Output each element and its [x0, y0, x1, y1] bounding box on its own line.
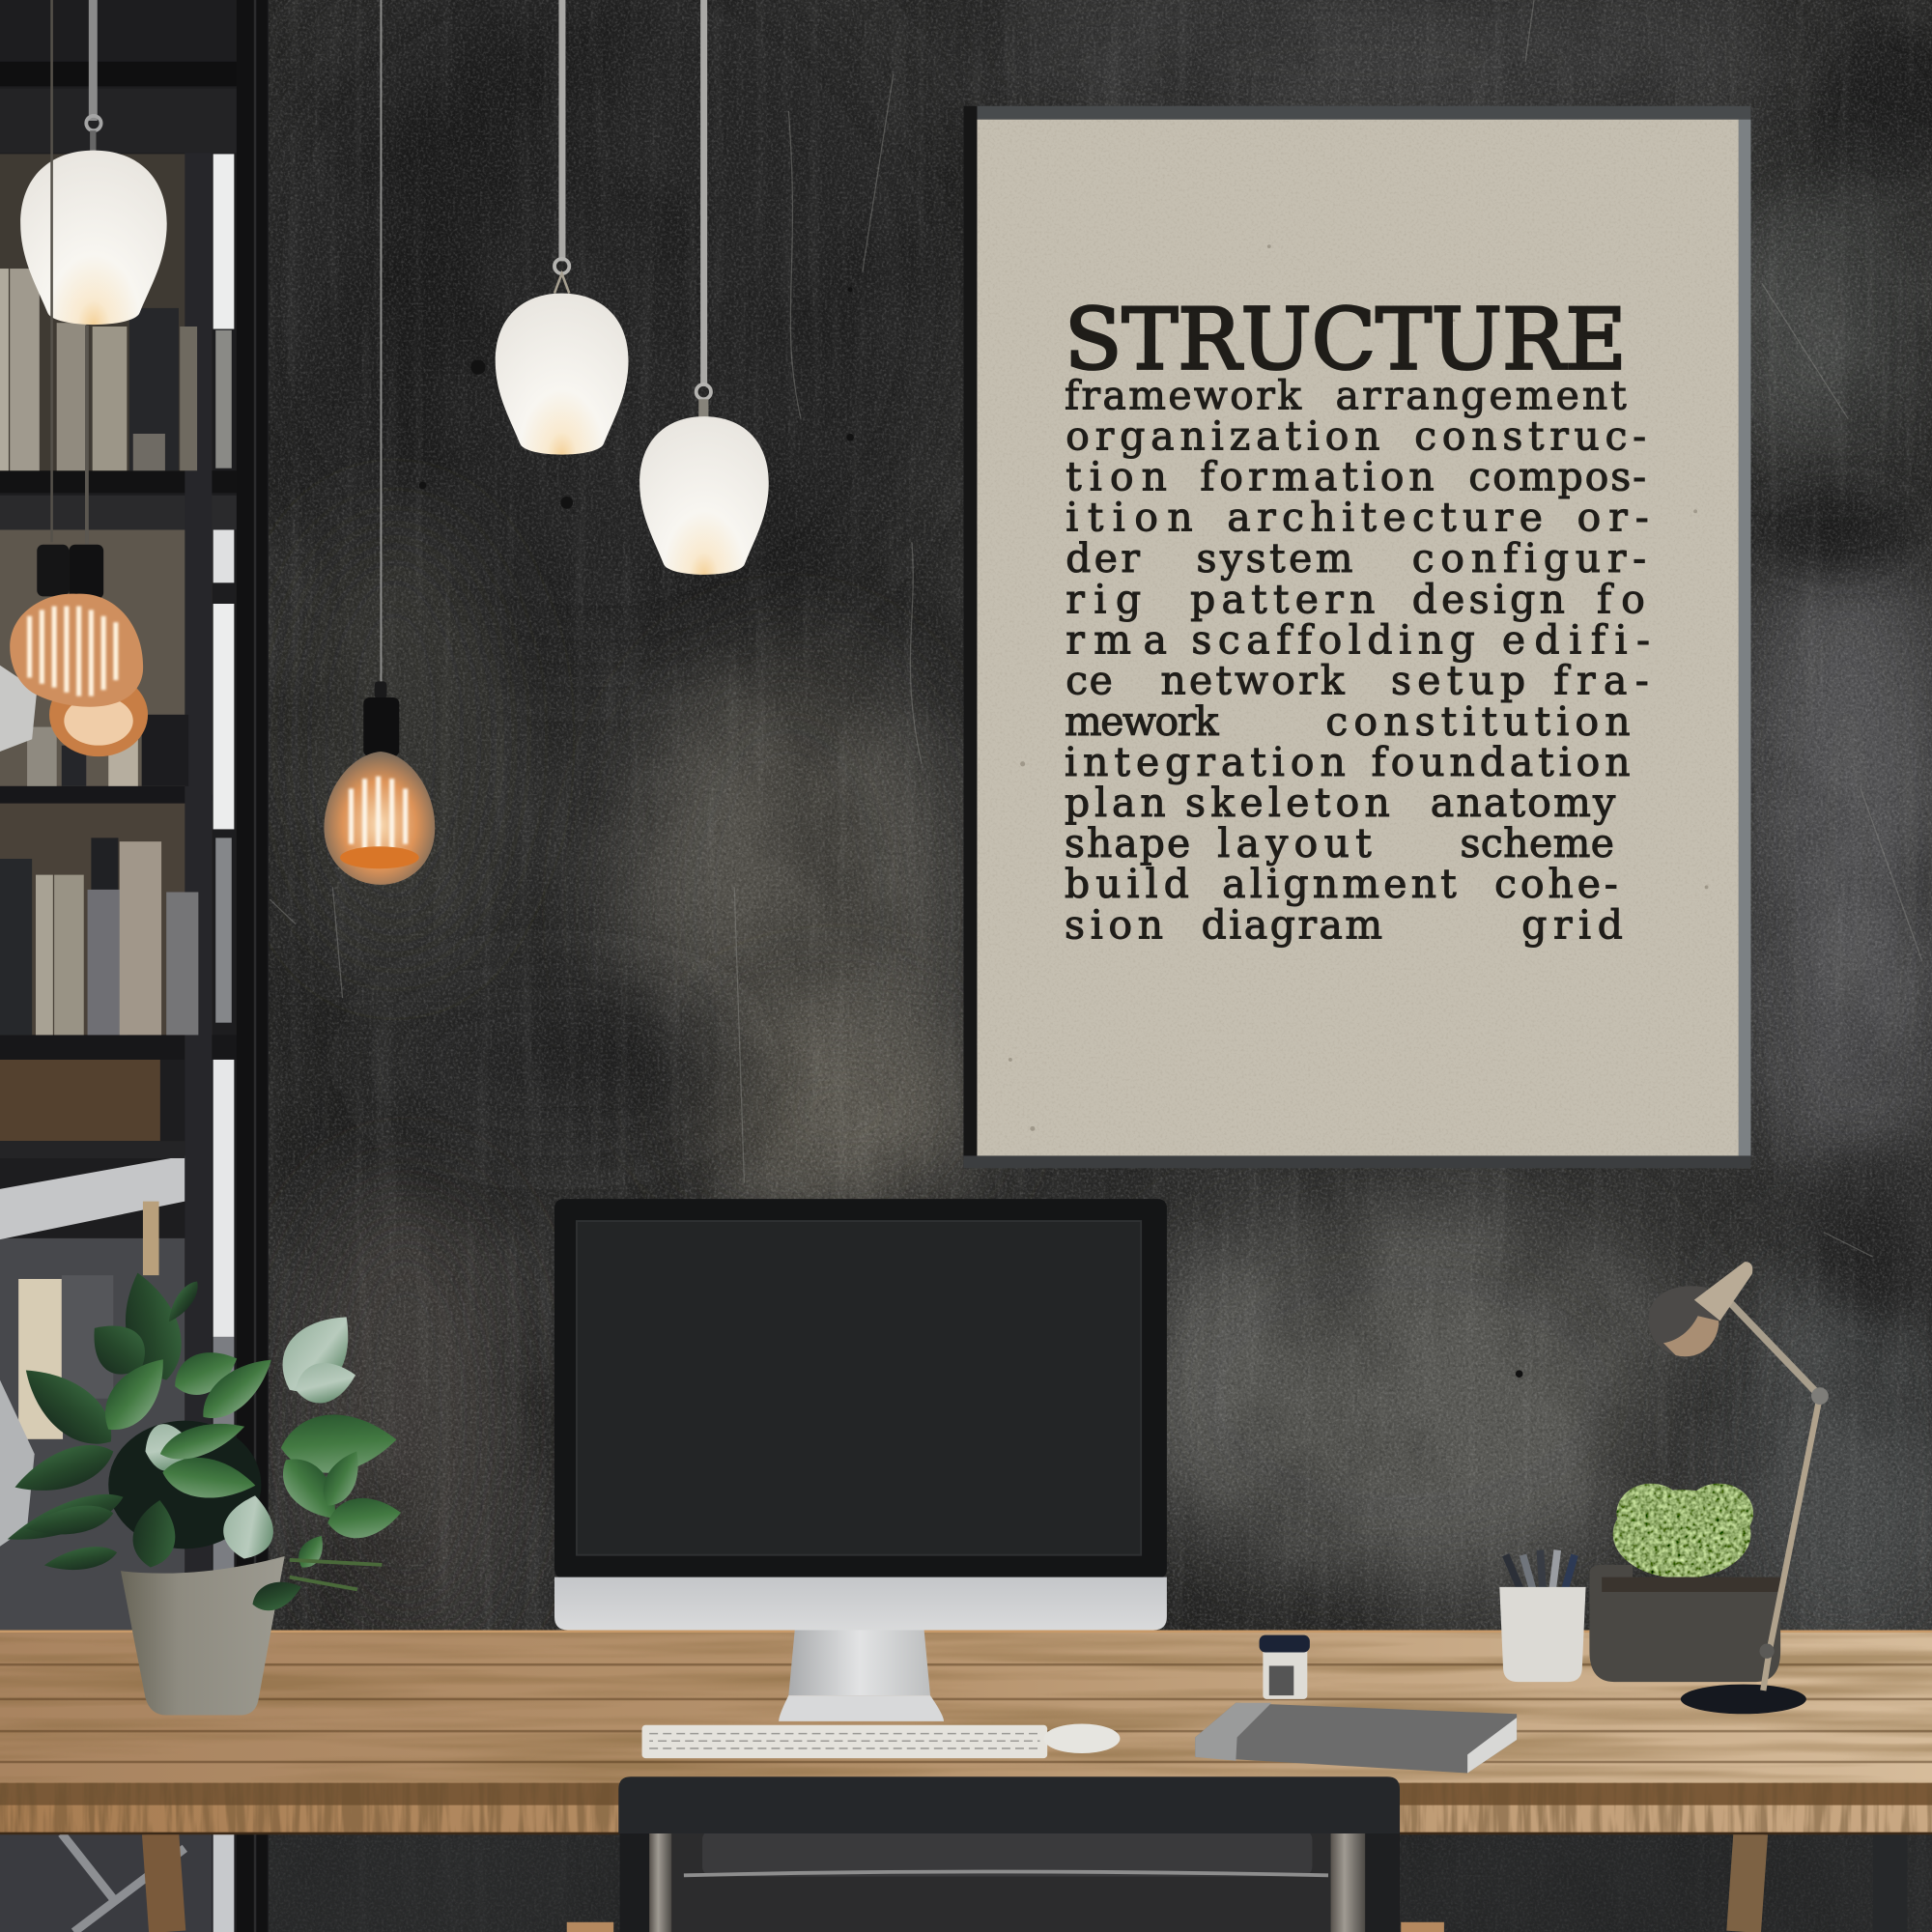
pen cup	[1499, 1550, 1586, 1682]
poster word list: system	[1197, 535, 1353, 582]
books mid shelf	[0, 666, 188, 786]
poster word list: edifi-	[1502, 617, 1650, 664]
poster word list: cohe-	[1494, 861, 1618, 907]
poster word list: grid	[1521, 901, 1623, 948]
desk	[0, 1631, 1932, 1932]
poster word list: skeleton	[1185, 780, 1390, 826]
poster word list: compos-	[1468, 454, 1646, 500]
poster word list	[1065, 372, 1650, 948]
desk lamp	[1649, 1262, 1829, 1714]
poster word list: der	[1065, 535, 1140, 582]
poster word list: shape	[1065, 820, 1190, 867]
poster word list: organization	[1065, 413, 1380, 460]
poster word list: anatomy	[1431, 780, 1615, 826]
poster word list: sion	[1065, 901, 1163, 948]
poster frame	[963, 106, 1750, 1168]
books top shelf	[0, 269, 197, 470]
filament bulbs shelf left	[10, 0, 148, 756]
poster word list: constitution	[1325, 698, 1631, 745]
poster word list: build	[1065, 861, 1189, 907]
poster word list: configur-	[1412, 535, 1646, 582]
poster word list: architecture	[1227, 495, 1543, 541]
poster word list: rig	[1065, 577, 1141, 623]
poster word list: mework	[1065, 698, 1219, 745]
books bottom shelf	[0, 1202, 159, 1547]
poster word list: scheme	[1460, 820, 1614, 867]
poster word list: fra-	[1553, 658, 1649, 704]
filament bulb pendant	[324, 0, 435, 885]
pendant lamp right	[639, 0, 769, 575]
poster word list: rm	[1065, 617, 1131, 664]
poster word list: ition	[1065, 495, 1193, 541]
poster word list: plan	[1065, 780, 1166, 826]
poster word list: formation	[1200, 454, 1435, 500]
planter with herb	[1589, 1484, 1780, 1682]
plant pot	[121, 1556, 285, 1716]
poster word list: design	[1412, 577, 1565, 623]
poster word list: or-	[1577, 495, 1649, 541]
poster word list: fo	[1597, 577, 1645, 623]
plant foliage	[3, 1266, 404, 1589]
poster word list: pattern	[1190, 577, 1375, 623]
poster word list: alignment	[1222, 861, 1457, 907]
poster word list: construc-	[1414, 413, 1646, 460]
bookshelf	[0, 0, 269, 1932]
pendant lamp shelf left	[20, 0, 167, 325]
poster word list: tion	[1065, 454, 1167, 500]
shelf light strips	[213, 154, 234, 1932]
shelf x-brace	[62, 1833, 185, 1932]
poster paper	[977, 120, 1739, 1155]
notebook	[1195, 1703, 1517, 1773]
poster word list: network	[1161, 658, 1345, 704]
poster word list: foundation	[1372, 739, 1631, 785]
monitor stand	[779, 1631, 944, 1721]
poster word list: integration	[1065, 739, 1346, 785]
monitor	[554, 1199, 1167, 1631]
poster word list: setup	[1391, 658, 1525, 704]
poster word list: diagram	[1202, 901, 1382, 948]
chair	[567, 1776, 1444, 1932]
poster title: STRUCTURE	[1065, 291, 1627, 388]
poster word list: framework	[1065, 372, 1301, 418]
books lower shelf	[0, 838, 198, 1035]
mouse	[1043, 1723, 1120, 1753]
poster word list: arrangement	[1336, 372, 1627, 418]
poster word list: a	[1144, 617, 1167, 664]
potted plant	[3, 1266, 404, 1716]
keyboard	[642, 1725, 1047, 1758]
poster word list: scaffolding	[1191, 617, 1475, 664]
pendant lamp center	[496, 0, 629, 455]
poster word list: ce	[1065, 658, 1113, 704]
small jar	[1260, 1635, 1310, 1699]
poster word list: layout	[1217, 820, 1372, 867]
